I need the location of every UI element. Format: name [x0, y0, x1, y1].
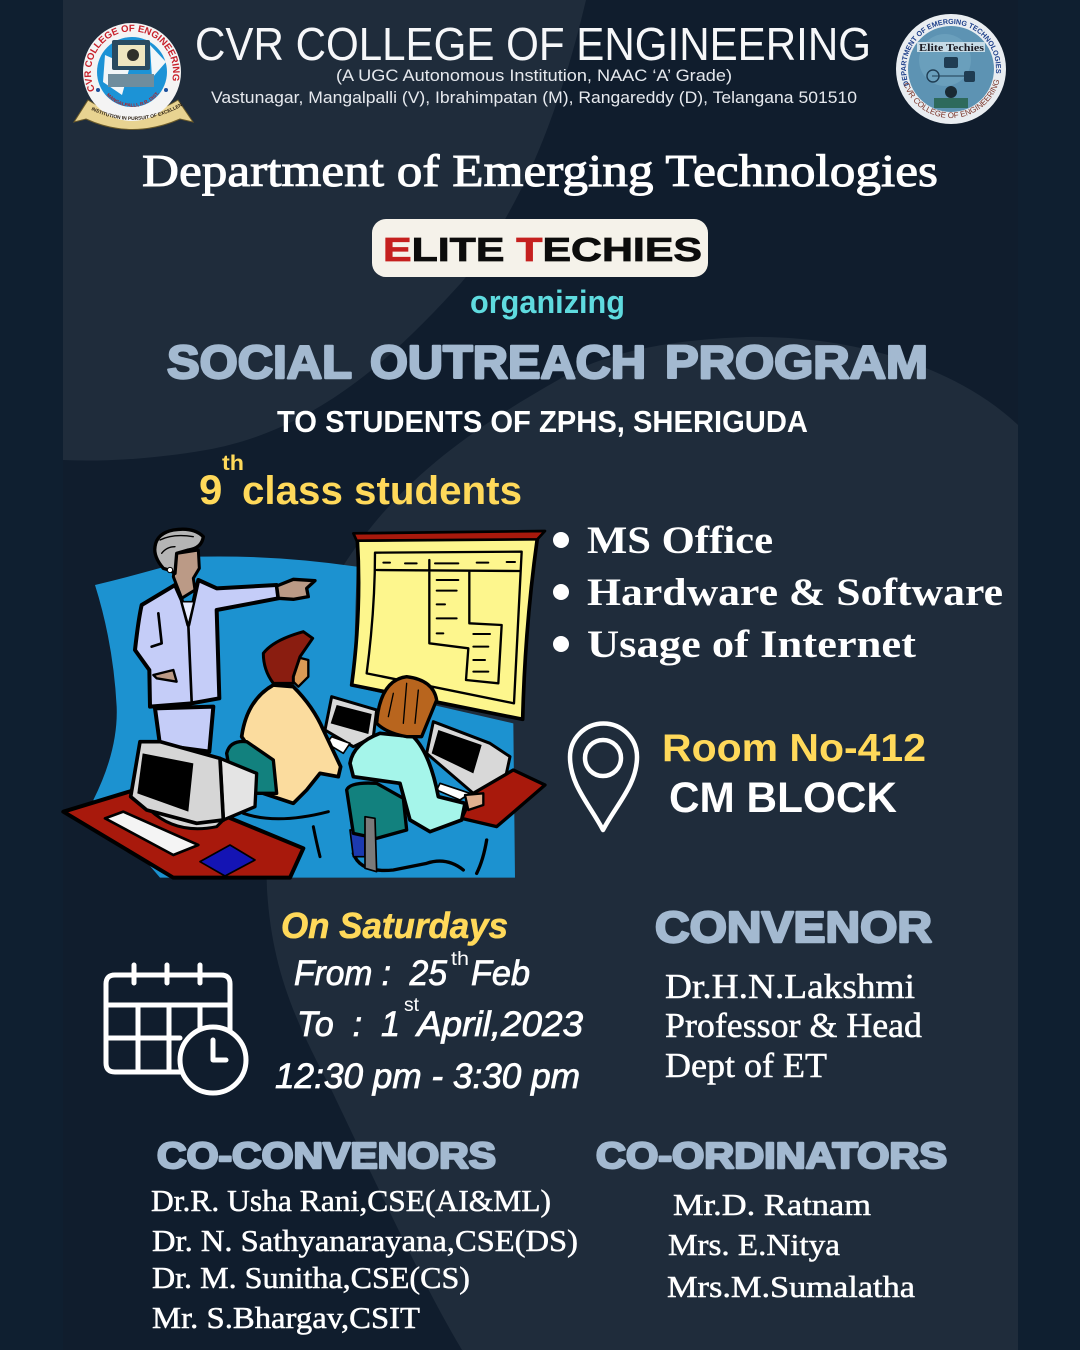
start date: Feb: [471, 954, 530, 993]
co-convenors names: Dr. N. Sathyanarayana,CSE(DS): [152, 1223, 578, 1258]
on Saturdays label: On Saturdays: [281, 905, 508, 946]
class students label: 9: [199, 466, 222, 513]
co-ordinators names: Mrs.M.Sumalatha: [667, 1269, 915, 1304]
end date: To : 1: [297, 1005, 400, 1044]
start date: [294, 949, 530, 993]
college logo: MANGALPALLI, R.R. DIST.: [106, 92, 159, 107]
accreditation line: (A UGC Autonomous Institution, NAAC ‘A’ Grade): [336, 66, 732, 85]
student 2: [347, 677, 487, 873]
program title: PROGRAM: [665, 336, 928, 388]
co-ordinators block: [596, 1135, 947, 1304]
end date: April,2023: [415, 1005, 584, 1044]
topics list: [553, 519, 1003, 666]
illustration: classroom with teacher and students: [63, 529, 545, 878]
co-convenors names: Dr. M. Sunitha,CSE(CS): [152, 1260, 470, 1295]
department logo: [896, 14, 1006, 124]
convenor heading: CONVENOR: [655, 903, 932, 952]
co-convenors names: [151, 1183, 578, 1335]
program title: OUTREACH: [370, 336, 646, 388]
time: 12:30 pm - 3:30 pm: [275, 1057, 580, 1096]
topic: Usage of Internet: Usage of Internet: [587, 623, 916, 666]
program title: SOCIAL: [167, 336, 352, 388]
end date: [297, 995, 584, 1044]
college logo: CVR COLLEGE OF ENGINEERING: [84, 24, 180, 92]
audience subtitle: TO STUDENTS OF ZPHS, SHERIGUDA: [277, 404, 808, 439]
class students label: [199, 452, 522, 513]
co-convenors names: Dr.R. Usha Rani,CSE(AI&ML): [151, 1183, 551, 1218]
convenor details: Professor & Head: [665, 1006, 923, 1045]
convenor details: Dept of ET: [665, 1046, 827, 1085]
co-convenors block: [151, 1135, 578, 1335]
co-ordinators names: Mrs. E.Nitya: [668, 1227, 840, 1262]
icon: calendar with clock: [106, 965, 246, 1093]
end date: st: [404, 995, 420, 1016]
desks: [63, 770, 545, 878]
front computer: [131, 742, 257, 829]
convenor details: [665, 967, 923, 1085]
projection board: [352, 531, 545, 719]
program title: [167, 336, 928, 388]
club badge: Elite Techies: [372, 219, 708, 277]
venue block: CM BLOCK: [669, 774, 897, 822]
organizing label: organizing: [470, 284, 625, 320]
topic: MS Office: MS Office: [587, 519, 773, 562]
college logo: [73, 23, 194, 130]
department logo: DEPARTMENT OF EMERGING TECHNOLOGIES: [901, 18, 1001, 86]
venue room: Room No-412: [662, 727, 926, 770]
start date: From : 25: [294, 954, 448, 993]
topic: Hardware and Software: Hardware & Software: [587, 571, 1003, 614]
teacher: [135, 529, 315, 752]
icon: location pin: [570, 723, 637, 830]
address line: Vastunagar, Mangalpalli (V), Ibrahimpatan (M), Rangareddy (D), Telangana 501510: [211, 88, 857, 107]
student monitors: [325, 697, 510, 800]
convenor details: Dr.H.N.Lakshmi: [665, 967, 915, 1006]
schedule: [275, 905, 584, 1096]
co-ordinators names: Mr.D. Ratnam: [673, 1187, 871, 1222]
co-ordinators names: [667, 1187, 915, 1304]
class students label: class students: [242, 469, 522, 513]
college name: CVR COLLEGE OF ENGINEERING: [195, 18, 871, 70]
department logo: CVR COLLEGE OF ENGINEERING: [904, 80, 999, 118]
start date: th: [451, 949, 469, 970]
co-ordinators heading: CO-ORDINATORS: [596, 1135, 947, 1176]
co-convenors names: Mr. S.Bhargav,CSIT: [152, 1300, 420, 1335]
department heading: Department of Emerging Technologies: [142, 145, 938, 196]
blue backdrop: [93, 556, 515, 878]
club badge: Elite Techies: ELITE TECHIES: [383, 231, 702, 268]
department logo: Elite Techies: [919, 43, 984, 54]
student 1: [227, 632, 341, 857]
co-convenors heading: CO-CONVENORS: [157, 1135, 496, 1176]
convenor block: [655, 903, 932, 1085]
class students label: th: [222, 452, 244, 475]
